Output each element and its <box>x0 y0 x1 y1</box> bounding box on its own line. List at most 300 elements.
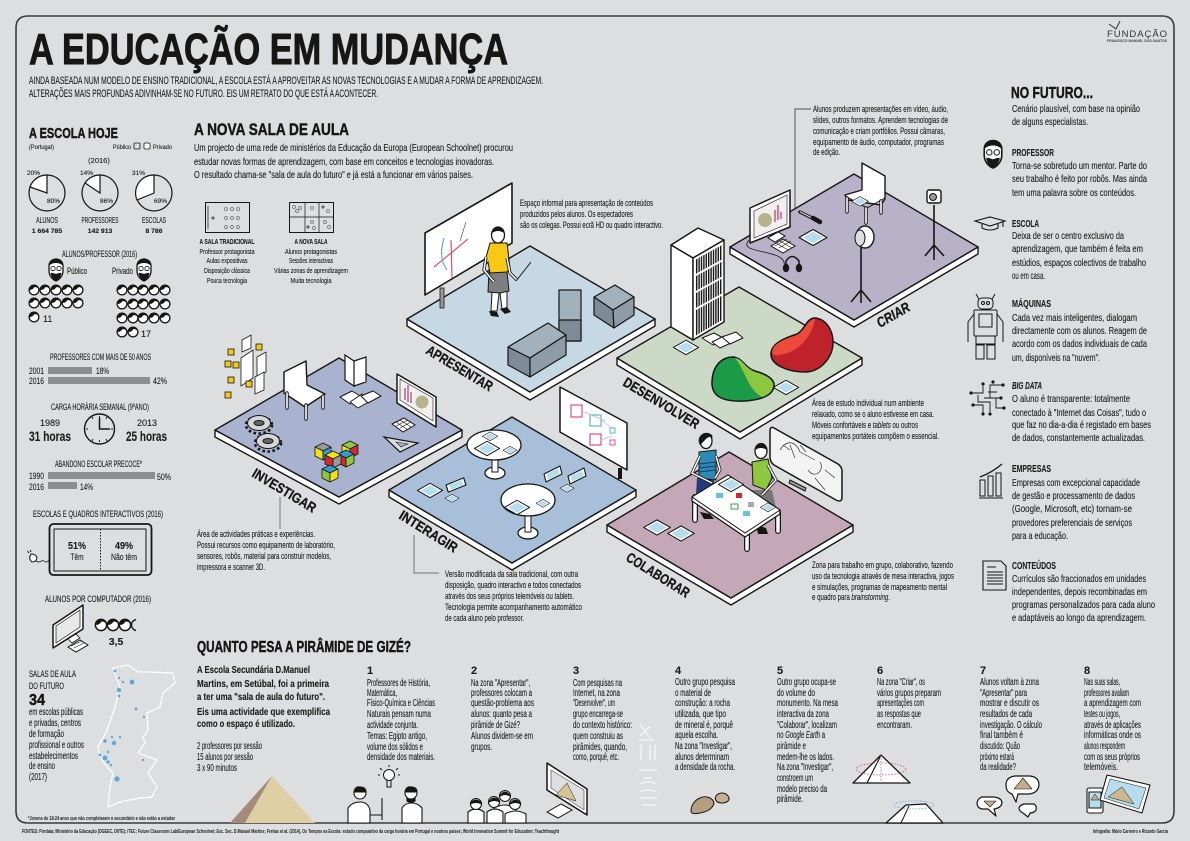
step 5: monumento. Na mesa <box>777 698 838 709</box>
icon: rocks <box>691 793 729 814</box>
step 2: questão-problema aos <box>471 698 534 709</box>
step 8: a aprendizagem com <box>1084 698 1141 709</box>
block: máquinas: Cada vez mais inteligentes, dialogam <box>1012 312 1137 324</box>
step 5: medem-lhe os lados. <box>777 752 834 763</box>
bar chart: abandono escolar precoce: 14% <box>80 482 93 492</box>
zone: Interagir platform <box>389 387 636 570</box>
step 4: Na zona "Investigar", <box>675 741 732 752</box>
callout: Investigar: Possui recursos como equipamento de laboratório, <box>197 540 335 550</box>
salas de aula do futuro text: de ensino <box>29 761 55 772</box>
step 3: do contexto histórico: <box>573 720 632 731</box>
step 8: 8 <box>1084 665 1090 677</box>
step 7: final também é <box>980 730 1023 741</box>
callout: Apresentar: Espaço informal para apresentação de conteúdos <box>520 198 653 208</box>
callout: Apresentar: produzidos pelos alunos. Os espectadores <box>520 209 633 219</box>
intro bold text: 2 professores por sessão <box>197 741 262 752</box>
step 1: densidade dos materiais. <box>367 752 435 763</box>
block: big data: BIG DATA <box>1012 381 1042 392</box>
salas de aula do futuro text: SALAS DE AULA <box>29 669 77 679</box>
label: Criar: CRIAR <box>874 298 913 331</box>
legend: (2016) <box>88 156 110 165</box>
step 7: "Apresentar" para <box>980 688 1027 699</box>
monitor with charts <box>750 190 795 253</box>
zone: Apresentar platform <box>407 183 655 400</box>
bar chart: abandono escolar precoce: 1990 <box>29 471 44 481</box>
round table <box>501 484 555 539</box>
bar chart: professores com mais de 50 anos <box>29 352 167 386</box>
sticky notes and sheets <box>225 335 266 398</box>
salas de aula do futuro text <box>29 669 84 783</box>
callout: Interagir: de cada aluno pelo professor. <box>445 613 524 623</box>
interactive board chart: 51% <box>68 540 87 552</box>
step 2 <box>471 665 534 753</box>
lamp on tripod <box>851 226 874 303</box>
salas de aula do futuro text: (2017) <box>29 772 47 783</box>
callout: Criar <box>795 104 948 208</box>
block: escola: Deixa de ser o centro exclusivo da <box>1012 230 1124 242</box>
pie chart: alunos <box>27 170 65 235</box>
intro text <box>194 142 513 181</box>
step 7: discutido: Quão <box>980 741 1020 752</box>
block: empresas: (Google, Microsoft, etc) tornam-se <box>1012 503 1132 515</box>
step 2: pirâmide de Gizé? <box>471 720 520 731</box>
whiteboard <box>425 183 512 308</box>
icon: bar chart rising <box>979 464 1003 498</box>
interactive table <box>692 475 780 549</box>
step 2: alunos: quanto pesa a <box>471 709 532 720</box>
icon: two teachers <box>348 787 422 823</box>
chair <box>845 163 885 223</box>
heading: QUANTO PESA A PIRÂMIDE DE GIZÉ? <box>197 637 411 656</box>
intro text: estudar novas formas de aprendizagem, com base em conceitos e tecnologias inovadoras. <box>194 156 494 168</box>
callout: Criar: equipamento de áudio, computador, programas <box>813 137 944 147</box>
step 5: Na zona "Investigar", <box>777 762 833 773</box>
intro bold text: 15 alunos por sessão <box>197 752 253 763</box>
callout: Desenvolver <box>812 398 939 441</box>
step 5: modelo preciso da <box>777 784 827 795</box>
step 2: 2 <box>471 665 477 677</box>
papers <box>702 332 743 348</box>
block: escola: ESCOLA <box>1012 219 1039 230</box>
salas de aula do futuro text: de formação <box>29 729 64 740</box>
step 2: Alunos dividem-se em <box>471 731 533 742</box>
step 1: Temas: Egipto antigo, <box>367 731 427 742</box>
chart: alunos por professor: 17 <box>141 329 151 339</box>
tablet <box>799 230 827 246</box>
icon: wire pyramid <box>853 755 910 783</box>
block: professor <box>1012 148 1147 199</box>
block: big data: O aluno é transparente: totalmente <box>1012 393 1130 405</box>
step 5: do volume do <box>777 688 815 699</box>
pie chart: escolas: 69% <box>154 198 167 205</box>
step 7: investigação. O cálculo <box>980 720 1042 731</box>
step 5: pirâmide e <box>777 741 806 752</box>
legend: Público <box>113 144 131 151</box>
panel: Quanto pesa a pirâmide de Gizé <box>197 637 1150 823</box>
step 1: Naturais pensam numa <box>367 709 431 720</box>
diagram: nova sala: Muita tecnologia <box>290 276 332 285</box>
callout: Colaborar: uso da tecnologia através de mesa interactiva, jogos <box>812 571 954 581</box>
block: empresas <box>1012 464 1140 542</box>
callout: Criar: de edição. <box>813 147 840 157</box>
step 8: alunos respondem <box>1084 741 1125 752</box>
book <box>345 355 366 386</box>
intro: de alguns especialistas. <box>1012 116 1088 128</box>
block: máquinas: MÁQUINAS <box>1012 297 1051 310</box>
salas de aula do futuro text: DO FUTURO <box>29 681 64 691</box>
zone: Investigar platform <box>215 335 462 504</box>
step 3: "Desenvolver", um <box>573 698 615 709</box>
diagram: nova sala: A NOVA SALA <box>294 237 328 246</box>
callout: Desenvolver: equipamentos portáteis compõem o essencial. <box>812 431 939 441</box>
bar chart: abandono escolar precoce: ABANDONO ESCOLAR PRECOCE* <box>55 459 142 469</box>
step 7: próximo estará <box>980 752 1014 763</box>
block: conteúdos <box>1012 559 1155 624</box>
callout: Interagir: através dos seus próprios telemóveis ou tablets. <box>445 591 574 601</box>
subtitle <box>29 74 543 100</box>
callout: Apresentar <box>520 198 663 230</box>
step 7: da realidade? <box>980 762 1016 773</box>
bar chart: professores com mais de 50 anos: 2001 <box>29 366 44 376</box>
icon: document <box>983 561 1006 590</box>
step 8: com os seus próprios <box>1084 752 1140 763</box>
pie chart: professores: 14% <box>80 170 93 177</box>
carga horária with clock icon: 31 horas <box>29 429 71 444</box>
step 8: testes ou jogos, <box>1084 709 1120 720</box>
interactive board chart: Têm <box>70 552 84 562</box>
block: big data <box>1012 381 1151 444</box>
step 4: construção: a rocha <box>675 698 730 709</box>
pie chart: professores <box>80 170 119 235</box>
label: Colaborar: COLABORAR <box>623 549 693 601</box>
step 4: a densidade da rocha. <box>675 762 735 773</box>
step 8: Nas suas salas, <box>1084 677 1120 688</box>
step 1: Professores de História, <box>367 678 430 689</box>
carga horária with clock icon: CARGA HORÁRIA SEMANAL (9ºANO) <box>51 402 149 412</box>
block: empresas: provedores preferenciais de serviços <box>1012 517 1132 529</box>
intro bold text <box>197 664 330 774</box>
gears <box>246 416 281 452</box>
panel: A escola hoje <box>27 125 175 822</box>
salas de aula do futuro text: em escolas públicas <box>29 707 83 718</box>
zone: Criar platform <box>730 163 978 327</box>
step 2: grupos. <box>471 742 492 753</box>
interactive board chart: Não têm <box>111 552 137 562</box>
camera on tripod <box>925 190 944 260</box>
step 7: 7 <box>980 665 986 677</box>
legend <box>29 143 172 165</box>
callout: Colaborar: Zona para trabalho em grupo, colaborativo, fazendo <box>812 560 953 570</box>
bar chart: abandono escolar precoce: 50% <box>157 472 171 482</box>
pie chart: alunos: 1 664 785 <box>32 228 62 235</box>
callout: Interagir <box>414 535 582 623</box>
intro bold text: Eis uma actividade que exemplifica <box>197 706 330 718</box>
diagram: sala tradicional <box>200 202 255 285</box>
icon: lightbulb <box>378 765 400 787</box>
step 3: pirâmides, quando, <box>573 742 627 753</box>
callout: Investigar: sensores, robôs, material para construir modelos, <box>197 551 331 561</box>
mind-map screen <box>560 387 627 479</box>
heading: A nova sala de aula: A NOVA SALA DE AULA <box>194 120 349 139</box>
callout: Colaborar: e simulações, programas de mapeamento mental <box>812 582 947 592</box>
bar chart: professores com mais de 50 anos: 18% <box>96 366 109 376</box>
callout: Apresentar: são os colegas. Possui ecrã HD ou quadro interactivo. <box>520 220 663 230</box>
step 4: de mineral é, porquê <box>675 720 733 731</box>
legend: Privado <box>153 144 172 151</box>
intro bold text: A Escola Secundária D.Manuel <box>197 664 310 676</box>
tablet <box>773 380 799 395</box>
step 3 <box>573 665 632 763</box>
chart: alunos por professor: ALUNOS/PROFESSOR (2016) <box>62 249 137 259</box>
pie chart: alunos: 80% <box>47 198 60 205</box>
icon: speech bubbles <box>977 776 1039 817</box>
logo: Fundação Francisco Manuel dos Santos <box>1107 21 1168 43</box>
step 4: Outro grupo pesquisa <box>675 677 735 688</box>
diagram: sala tradicional: Pouca tecnologia <box>207 276 248 285</box>
carga horária with clock icon: 2013 <box>137 418 157 428</box>
diagram: nova sala: Alunos protagonistas <box>285 247 337 256</box>
icon: computer with pyramid <box>547 763 587 818</box>
label: Desenvolver: DESENVOLVER <box>620 374 702 432</box>
step 6: apresentações com <box>877 698 924 709</box>
tablet <box>673 340 699 355</box>
step 1: 1 <box>367 665 373 677</box>
alunos por computador: 3,5 <box>109 636 123 648</box>
coloured cubes <box>315 441 358 482</box>
icon: professor <box>984 140 1002 168</box>
icon: robot <box>968 294 1003 359</box>
step 4: alunos determinam <box>675 752 729 763</box>
bar chart: professores com mais de 50 anos: 2016 <box>29 376 44 386</box>
step 8: telemóveis. <box>1084 762 1118 773</box>
pie chart: professores: 86% <box>100 198 113 205</box>
step 4: aquela escolha. <box>675 730 718 741</box>
zone: Desenvolver platform <box>617 228 862 439</box>
step 3: quem construiu as <box>573 731 623 742</box>
callout: Colaborar <box>812 560 954 602</box>
round table <box>467 430 521 479</box>
callout: Investigar: Área de actividades práticas e experiências. <box>197 529 315 539</box>
boxes <box>508 285 634 377</box>
subtitle: ALTERAÇÕES MAIS PROFUNDAS ADIVINHAM-SE NO FUTURO. EIS UM RETRATO DO QUE ESTÁ A ACONTECER. <box>29 87 378 100</box>
step 1: Matemática, <box>367 688 397 699</box>
pie chart: alunos: 20% <box>27 170 40 177</box>
block: empresas: EMPRESAS <box>1012 464 1051 475</box>
microphone <box>800 212 820 222</box>
block: professor: tem uma palavra sobre os conteúdos. <box>1012 187 1136 199</box>
pie chart: professores: PROFESSORES <box>82 215 119 225</box>
pie chart: escolas <box>132 170 172 235</box>
bar chart: professores com mais de 50 anos: PROFESSORES COM MAIS DE 50 ANOS <box>50 352 151 362</box>
step 6: vários grupos preparam <box>877 688 941 699</box>
salas de aula do futuro text: profissional e outros <box>29 740 84 751</box>
step 6 <box>877 665 941 731</box>
pie chart: escolas: ESCOLAS <box>142 215 166 225</box>
monitor <box>392 374 436 432</box>
pie chart: alunos: ALUNOS <box>36 215 58 225</box>
step 5: pirâmide. <box>777 794 803 805</box>
carga horária with clock icon: 1989 <box>40 418 60 428</box>
salas de aula do futuro text: e privadas, centros <box>29 718 81 729</box>
intro bold text: 3 x 90 minutos <box>197 763 237 774</box>
block: máquinas <box>1012 297 1147 364</box>
pie chart: escolas: 8 786 <box>145 228 163 235</box>
icon: truncated pyramid model <box>886 801 943 823</box>
block: escola: ou em casa. <box>1012 270 1045 282</box>
step 6: as respostas que <box>877 709 921 720</box>
step 1: Físico-Química e Ciências <box>367 698 435 709</box>
step 3: Internet, na zona <box>573 688 620 699</box>
step 8: professores avaliam <box>1084 688 1129 699</box>
callout: Desenvolver: Móveis confortáveis e tablets ou outros <box>812 420 918 430</box>
green beanbag <box>712 357 774 401</box>
icon: circuit <box>969 380 1006 416</box>
diagram: nova sala <box>274 202 348 285</box>
bar chart: abandono escolar precoce: 2016 <box>29 482 44 492</box>
step 6: encontraram. <box>877 720 912 731</box>
set square <box>384 437 418 452</box>
map of Portugal <box>98 665 175 807</box>
step 2: professores colocam a <box>471 688 532 699</box>
step 5: no Google Earth a <box>777 730 825 741</box>
step 7: Alunos voltam à zona <box>980 677 1039 688</box>
callout: Desenvolver: Área de estudo individual num ambiente <box>812 398 924 408</box>
pie chart: professores: 142 913 <box>88 228 112 235</box>
diagram: nova sala: Várias zonas de aprendizagem <box>274 266 348 275</box>
bar chart: professores com mais de 50 anos: 42% <box>153 376 167 386</box>
logo: Fundação Francisco Manuel dos Santos: FRANCISCO MANUEL DOS SANTOS <box>1107 39 1168 43</box>
bar chart: abandono escolar precoce <box>29 459 171 492</box>
step 4: o material de <box>675 688 711 699</box>
icon: students group <box>468 790 526 823</box>
step 1: actividade conjunta. <box>367 720 418 731</box>
step 8: através de aplicações <box>1084 720 1141 731</box>
step 5: interactiva da zona <box>777 709 829 720</box>
interactive board chart: ESCOLAS E QUADROS INTERACTIVOS (2016) <box>33 509 163 519</box>
subtitle: AINDA BASEADA NUM MODELO DE ENSINO TRADICIONAL, A ESCOLA ESTÁ A APROVEITAR AS NOVAS TECNOLOGIAS E A MUDAR A FORMA DE APRENDIZAGEM. <box>29 74 543 87</box>
logo: Fundação Francisco Manuel dos Santos: FUNDAÇÃO <box>1107 29 1167 40</box>
interactive board chart <box>28 509 163 575</box>
label: Apresentar: APRESENTAR <box>423 342 496 394</box>
pie chart: escolas: 31% <box>132 170 145 177</box>
cable <box>747 240 784 268</box>
zone: Colaborar platform <box>607 427 853 605</box>
chair <box>284 361 325 419</box>
step 5: "Colaborar", localizam <box>777 720 837 731</box>
diagram: nova sala: Sessões interactivas <box>289 256 333 265</box>
step 3: 3 <box>573 665 579 677</box>
step 8: informáticas onde os <box>1084 730 1141 741</box>
chart: alunos por professor <box>29 249 170 339</box>
icon: graduation cap <box>975 217 1005 230</box>
block: máquinas: um, disponíveis na "nuvem". <box>1012 352 1100 364</box>
step 5: Outro grupo ocupa-se <box>777 677 836 688</box>
step 5: 5 <box>777 665 783 677</box>
step 7: mostrar e discutir os <box>980 698 1039 709</box>
floor tablets <box>644 520 694 541</box>
intro <box>1012 103 1140 128</box>
intro bold text: como o espaço é utilizado. <box>197 718 295 730</box>
bookcase <box>671 228 724 340</box>
interactive board chart: 49% <box>115 540 134 552</box>
diagram: sala tradicional: A SALA TRADICIONAL <box>200 237 255 246</box>
step 4: 4 <box>675 665 682 677</box>
floor tablets <box>417 466 586 502</box>
callout: Criar: comunicação e criam portfólios. Possui câmaras, <box>813 126 945 136</box>
mind-map whiteboard <box>770 427 842 501</box>
callout: Investigar: impressora e scanner 3D. <box>197 562 265 572</box>
label: Interagir: INTERAGIR <box>396 507 461 556</box>
block: escola <box>1012 219 1146 282</box>
title: A EDUCAÇÃO EM MUDANÇA <box>29 24 508 74</box>
icon: white hieroglyphs <box>639 724 657 805</box>
callout: Interagir: Tecnologia permite acompanhamento automático <box>445 602 582 612</box>
heading: No futuro: NO FUTURO... <box>1011 85 1093 102</box>
panel: No futuro <box>968 85 1155 624</box>
step 3: Com pesquisas na <box>573 678 622 689</box>
callout: Interagir: Versão modificada da sala tradicional, com outra <box>445 569 579 579</box>
chart: alunos por professor: Público <box>67 266 87 276</box>
block: empresas: de gestão e processamento de dados <box>1012 490 1135 502</box>
step 4 <box>675 665 735 773</box>
diagram: sala tradicional: Disposição clássica <box>204 266 251 275</box>
alunos por computador <box>45 594 151 652</box>
diagram: sala tradicional: Professor protagonista <box>200 247 255 256</box>
carga horária with clock icon: 25 horas <box>126 429 167 444</box>
diagram: sala tradicional: Aulas expositivas <box>206 256 248 265</box>
callout: Investigar <box>197 497 335 572</box>
heading: A escola hoje: A ESCOLA HOJE <box>29 125 118 142</box>
salas de aula do futuro text: estabelecimentos <box>29 751 78 762</box>
carga horária with clock icon <box>29 402 167 444</box>
alunos por computador: ALUNOS POR COMPUTADOR (2016) <box>45 594 151 604</box>
intro text: Um projecto de uma rede de ministérios da Educação da Europa (European Schoolnet) procurou <box>194 142 513 154</box>
block: conteúdos: CONTEÚDOS <box>1012 559 1056 572</box>
intro bold text: Martins, em Setúbal, foi a primeira <box>197 678 329 690</box>
callout: Criar: slides, outros formatos. Aprendem tecnologias de <box>813 115 948 125</box>
presenter <box>483 227 531 317</box>
callout: Criar: Alunos produzem apresentações em vídeo, áudio, <box>813 104 948 114</box>
step 2: Na zona "Apresentar", <box>471 678 530 689</box>
step 6: 6 <box>877 665 883 677</box>
step 5 <box>777 665 838 805</box>
block: escola: aprendizagem, que também é feita em <box>1012 243 1143 255</box>
callout: Interagir: disposição, quadro interactivo e todos conectados <box>445 580 581 590</box>
man in green <box>750 444 776 534</box>
icon: pyramid <box>230 776 315 823</box>
intro text: O resultado chama-se "sala de aula do futuro" e já está a funcionar em vários países. <box>194 169 473 181</box>
step 1 <box>367 665 435 763</box>
step 3: grupo encarrega-se <box>573 709 623 720</box>
sources: FONTES: Pordata; Ministério da Educação (DGEEC, DIITE); iTEC; Future Classroom Lab/European Schoolnet; Esc. Sec. D.Manuel Martins; Freitas et al. (2014), Os Tempos na Escola: estudo comparativo da carga horária em Portugal e noutros países; World Innovation Summit for Education; Teachthought <box>22 829 559 835</box>
headphones <box>783 256 802 272</box>
label: Investigar: INVESTIGAR <box>249 465 319 516</box>
step 1: volume dos sólidos e <box>367 742 423 753</box>
intro bold text: a ter uma "sala de aula do futuro". <box>197 691 325 703</box>
salas de aula do futuro text: 34 <box>29 692 45 709</box>
chart: alunos por professor: Privado <box>112 266 133 276</box>
step 7 <box>980 665 1042 773</box>
step 6: Na zona "Criar", os <box>877 677 925 688</box>
red beanbag <box>771 318 833 372</box>
callout: Colaborar: e quadro para brainstorming. <box>812 592 890 602</box>
callout: Desenvolver: relaxado, como se o aluno estivesse em casa. <box>812 409 934 419</box>
step 3: como, porquê, etc. <box>573 752 619 763</box>
icon: phone and tablet <box>1087 775 1150 813</box>
woman in blue <box>692 433 720 519</box>
step 4: utilizada, que tipo <box>675 709 726 720</box>
step 5: constroem um <box>777 773 813 784</box>
